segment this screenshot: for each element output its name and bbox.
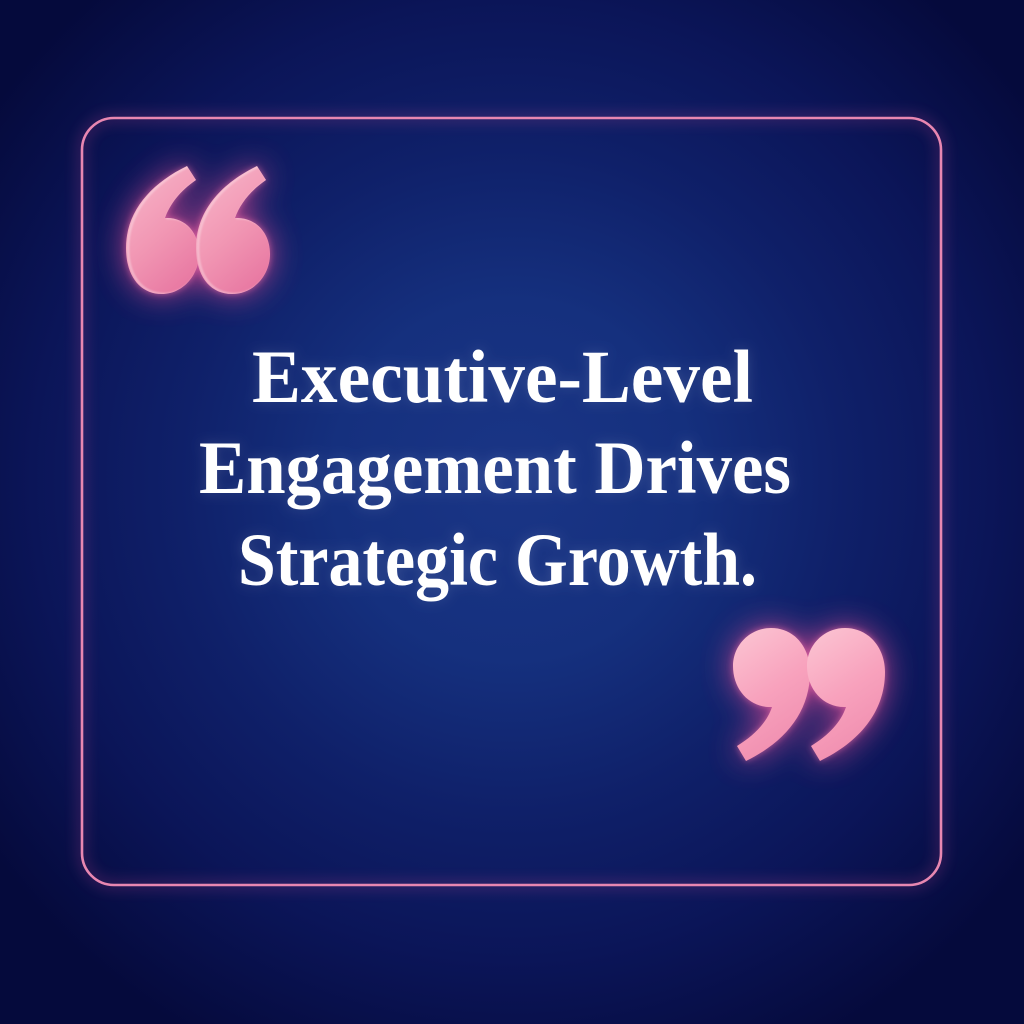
icon: opening quotation mark — [126, 166, 272, 294]
quote text: Executive-Level — [252, 336, 753, 419]
quote text: Strategic Growth. — [238, 519, 757, 602]
quote text — [199, 336, 791, 602]
icon: closing quotation mark — [733, 628, 885, 761]
panel: quote frame — [82, 118, 941, 885]
quote text: Engagement Drives — [199, 427, 791, 510]
